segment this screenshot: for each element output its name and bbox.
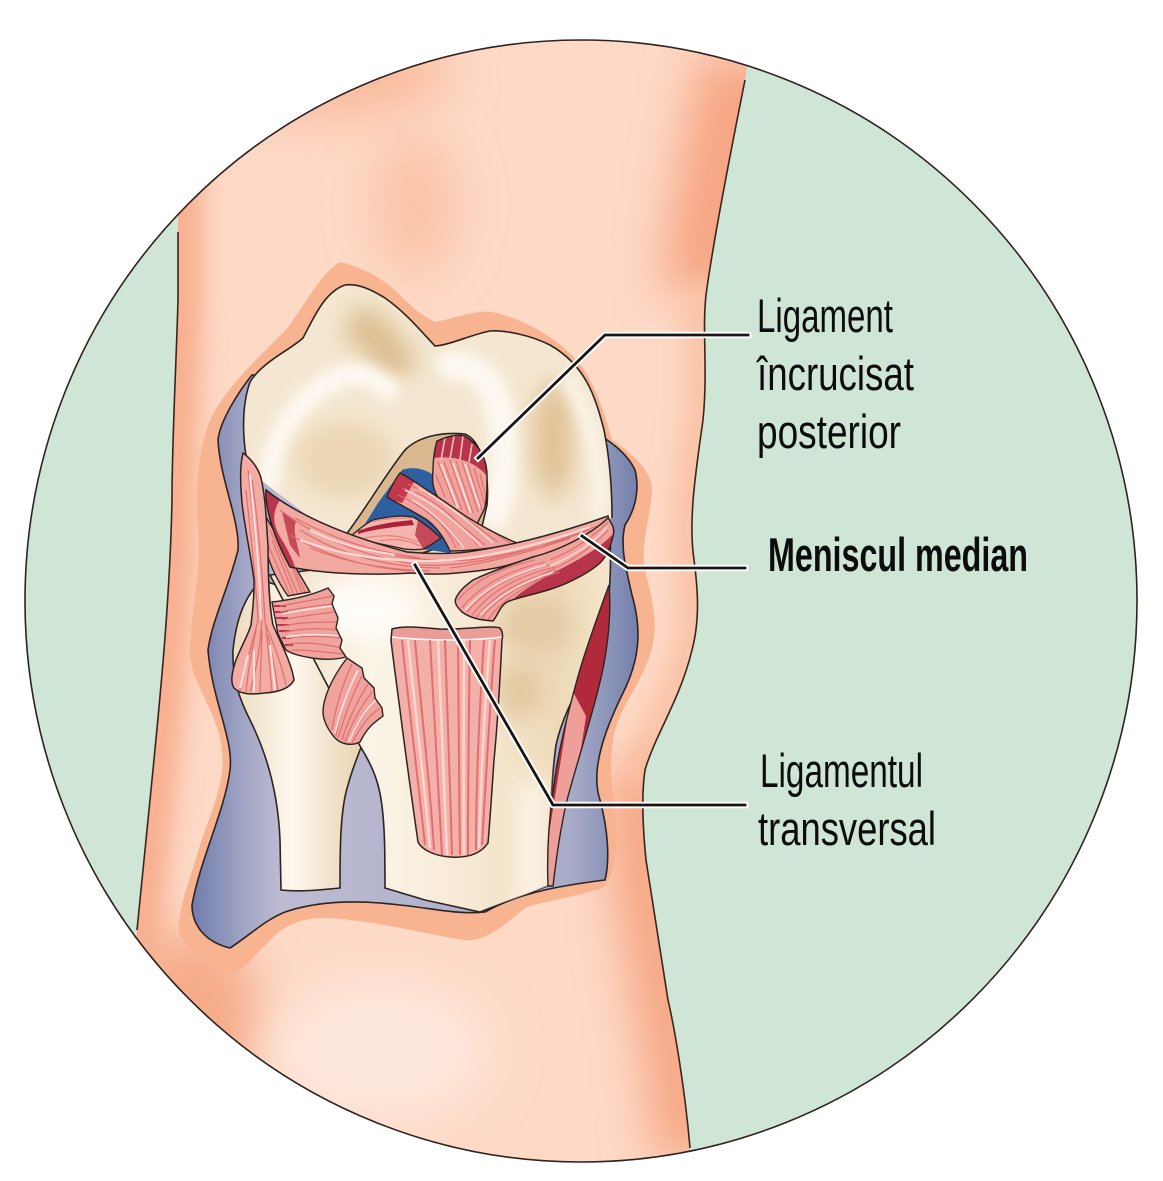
ligament: small fan: [323, 658, 383, 744]
label: ligamentul transversal: Ligamentul: [760, 744, 923, 797]
ligament: lower cruciate band: [350, 516, 445, 552]
fibula bone: [233, 580, 362, 891]
ligament: peripheral band left: [266, 517, 310, 596]
ligament: posterior cruciate: [430, 435, 490, 524]
meniscus (transverse ligament band): [262, 486, 608, 574]
leader line: transverse ligament: [415, 565, 745, 805]
label: ligament incrucisat posterior: Ligament: [757, 289, 893, 342]
label: ligament incrucisat posterior: [755, 289, 914, 458]
label: ligament incrucisat posterior: posterior: [757, 405, 901, 458]
ligament: lateral collateral: [232, 453, 294, 694]
label: ligament incrucisat posterior: încrucisat: [755, 347, 914, 400]
label: meniscul median: Meniscul median: [768, 528, 1028, 581]
patellar tendon: [390, 625, 505, 857]
meniscus foot (lateral): [455, 518, 616, 621]
leg with knee: [136, 40, 748, 1162]
wound rim: [179, 262, 655, 975]
right side muscle strip: [540, 585, 610, 890]
label: ligamentul transversal: transversal: [758, 802, 936, 855]
tibia bone: [270, 535, 610, 912]
femur bone: [244, 285, 612, 560]
ligament: fan muscle stub: [272, 588, 346, 659]
leader line: median meniscus: [582, 536, 745, 568]
label: ligamentul transversal: [758, 744, 936, 855]
leader line: posterior cruciate: [478, 335, 748, 458]
ligament: anterior cruciate band: [385, 472, 517, 551]
joint cavity: [192, 375, 638, 948]
intercondylar notch: [345, 433, 488, 560]
